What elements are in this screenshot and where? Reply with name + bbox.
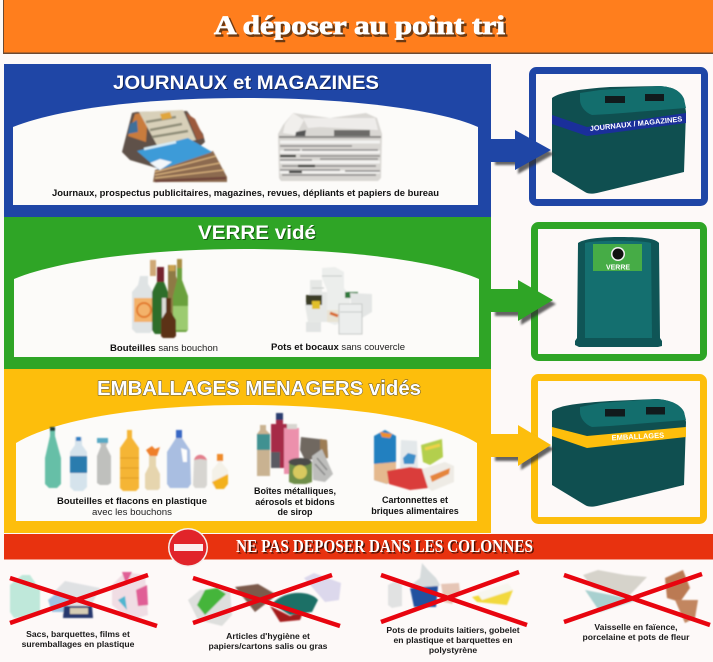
captions [57, 486, 459, 517]
captions: Pots et bocaux sans couvercle [271, 342, 405, 352]
captions: avec les bouchons [92, 507, 173, 517]
heading: JOURNAUX et MAGAZINES [113, 72, 379, 94]
panel: journaux et magazines [4, 64, 491, 217]
arrow: green [491, 280, 556, 325]
header banner [3, 0, 713, 54]
caption: Sacs, barquettes, films et [26, 629, 130, 639]
caption [386, 625, 520, 655]
frame: packaging bin [534, 378, 704, 520]
captions [110, 342, 405, 353]
caption: polystyrène [429, 645, 477, 655]
image: plastic bottles [45, 427, 228, 491]
captions: Boîtes métalliques, [254, 486, 336, 496]
item: crockery crossed out [564, 570, 710, 642]
caption [22, 629, 135, 649]
caption [583, 622, 690, 642]
white dome [13, 98, 478, 205]
white dome [16, 405, 477, 521]
red cross [564, 574, 710, 625]
red cross [10, 575, 157, 626]
panel: verre vidé [4, 217, 491, 369]
captions: Bouteilles sans bouchon [110, 343, 218, 353]
red cross [193, 575, 340, 626]
caption: Journaux, prospectus publicitaires, magazines, revues, dépliants et papiers de bureau [52, 188, 439, 198]
white dome [14, 249, 479, 357]
captions: Cartonnettes et [382, 495, 448, 505]
header title: A déposer au point tri [214, 11, 505, 40]
image: magazines [122, 110, 227, 182]
caption: en plastique et barquettes en [394, 635, 512, 645]
icon: packaging bin: EMBALLAGES [611, 431, 664, 442]
heading: VERRE vidé [198, 222, 316, 244]
heading: JOURNAUX et MAGAZINES [114, 73, 380, 95]
image: glass jars [305, 267, 372, 334]
captions: de sirop [277, 507, 313, 517]
frame: paper bin [532, 70, 704, 202]
caption: porcelaine et pots de fleur [583, 632, 690, 642]
captions: aérosols et bidons [255, 497, 335, 507]
item: dairy pots crossed out [381, 563, 527, 655]
caption: Pots de produits laitiers, gobelet [386, 625, 520, 635]
image: metal cans [257, 413, 333, 484]
heading: VERRE vidé [199, 223, 317, 245]
caption [209, 631, 328, 651]
panel: emballages ménagers vidés [4, 369, 491, 533]
arrow: blue [491, 130, 554, 174]
item: plastic bags crossed out [10, 572, 157, 649]
header title: A déposer au point tri [216, 13, 507, 42]
icon: packaging bin [552, 399, 686, 507]
icon: glass bin [575, 237, 662, 347]
banner title: NE PAS DEPOSER DANS LES COLONNES [236, 536, 533, 556]
banner: ne pas déposer [4, 528, 713, 567]
caption: Articles d'hygiène et [226, 631, 310, 641]
arrow: yellow [491, 425, 554, 470]
heading: EMBALLAGES MENAGERS vidés [97, 378, 421, 400]
icon: paper bin: JOURNAUX / MAGAZINES [589, 114, 683, 133]
icon: no entry [168, 528, 208, 567]
icon: paper bin [552, 86, 686, 194]
image: newspapers [278, 113, 382, 181]
frame: glass bin [534, 226, 704, 358]
item: hygiene articles crossed out [188, 573, 341, 651]
caption: papiers/cartons salis ou gras [209, 641, 328, 651]
red cross [381, 572, 527, 625]
caption: Vaisselle en faïence, [594, 622, 678, 632]
captions: Bouteilles et flacons en plastique [57, 496, 207, 506]
image: cartons [374, 430, 454, 491]
banner title: NE PAS DEPOSER DANS LES COLONNES [238, 538, 534, 558]
image: glass bottles [132, 259, 188, 338]
caption: suremballages en plastique [22, 639, 135, 649]
captions: briques alimentaires [371, 506, 459, 516]
icon: glass bin: VERRE [606, 264, 630, 272]
